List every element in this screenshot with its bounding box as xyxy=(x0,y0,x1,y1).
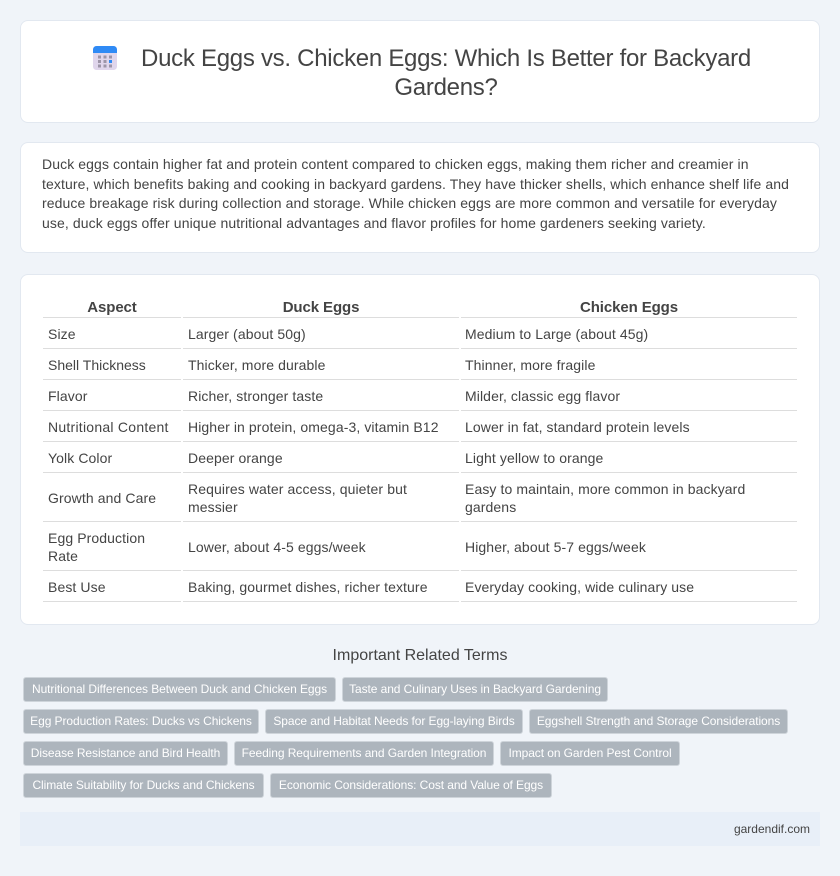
table rows: gardens xyxy=(465,499,516,515)
table rows: Thinner, more fragile xyxy=(465,357,596,373)
table rows: Higher, about 5-7 eggs/week xyxy=(465,539,646,555)
related term tags: Disease Resistance and Bird Health xyxy=(31,746,220,760)
table headers: Aspect xyxy=(87,299,137,316)
related term tags: Eggshell Strength and Storage Considerations xyxy=(537,714,780,728)
table rows: Everyday cooking, wide culinary use xyxy=(465,579,694,595)
related term tags: Climate Suitability for Ducks and Chickens xyxy=(32,778,255,792)
table rows: Lower, about 4-5 eggs/week xyxy=(188,539,366,555)
table rows: Baking, gourmet dishes, richer texture xyxy=(188,579,428,595)
table headers: Chicken Eggs xyxy=(580,299,678,316)
table headers xyxy=(87,299,678,316)
icon: calendar xyxy=(93,46,117,70)
table rows: Yolk Color xyxy=(48,450,112,466)
summary panel xyxy=(20,142,820,253)
related term tags: Egg Production Rates: Ducks vs Chickens xyxy=(30,714,252,728)
related term tags: Economic Considerations: Cost and Value of Eggs xyxy=(279,778,543,792)
table rows: Higher in protein, omega-3, vitamin B12 xyxy=(188,419,439,435)
summary text: use, duck eggs offer unique nutritional advantages and flavor profiles for home gardeners seeking variety. xyxy=(42,215,706,231)
table rows: Nutritional Content xyxy=(48,419,169,435)
related term tags: Feeding Requirements and Garden Integration xyxy=(242,746,486,760)
table headers: Duck Eggs xyxy=(283,299,359,316)
summary text xyxy=(42,156,789,231)
summary text: Duck eggs contain higher fat and protein content compared to chicken eggs, making them richer and creamier in xyxy=(42,156,749,172)
related term tags xyxy=(23,677,788,798)
table rows: Easy to maintain, more common in backyard xyxy=(465,481,745,497)
table rows: Flavor xyxy=(48,388,88,404)
related term tags: Nutritional Differences Between Duck and Chicken Eggs xyxy=(32,682,327,696)
summary text: reduce breakage risk during collection and storage. While chicken eggs are more common and versatile for everyday xyxy=(42,195,777,211)
table rows: Light yellow to orange xyxy=(465,450,603,466)
table rows: Egg Production xyxy=(48,530,145,546)
footer source: gardendif.com xyxy=(734,822,810,836)
summary text: texture, which benefits baking and cooking in backyard gardens. They have thicker shells, which enhance shelf life and xyxy=(42,176,789,192)
table rows: Medium to Large (about 45g) xyxy=(465,326,648,342)
table rows: Milder, classic egg flavor xyxy=(465,388,620,404)
table rows: Growth and Care xyxy=(48,490,156,506)
related terms heading: Important Related Terms xyxy=(333,647,507,664)
title: Duck Eggs vs. Chicken Eggs: Which Is Better for Backyard Gardens? xyxy=(141,45,751,101)
table rows: Best Use xyxy=(48,579,106,595)
table rows: messier xyxy=(188,499,238,515)
table rows: Richer, stronger taste xyxy=(188,388,323,404)
header panel xyxy=(20,20,820,123)
table rows: Larger (about 50g) xyxy=(188,326,306,342)
related term tags: Taste and Culinary Uses in Backyard Gardening xyxy=(349,682,601,696)
table rows: Deeper orange xyxy=(188,450,283,466)
table rows: Thicker, more durable xyxy=(188,357,326,373)
related term tags: Space and Habitat Needs for Egg-laying Birds xyxy=(273,714,515,728)
table rows: Size xyxy=(48,326,76,342)
table rows: Requires water access, quieter but xyxy=(188,481,407,497)
table rows: Lower in fat, standard protein levels xyxy=(465,419,690,435)
table rows xyxy=(43,317,797,602)
comparison table panel xyxy=(20,274,820,625)
related term tags: Impact on Garden Pest Control xyxy=(508,746,672,760)
table rows: Shell Thickness xyxy=(48,357,146,373)
table rows: Rate xyxy=(48,548,78,564)
footer bar xyxy=(20,812,820,846)
